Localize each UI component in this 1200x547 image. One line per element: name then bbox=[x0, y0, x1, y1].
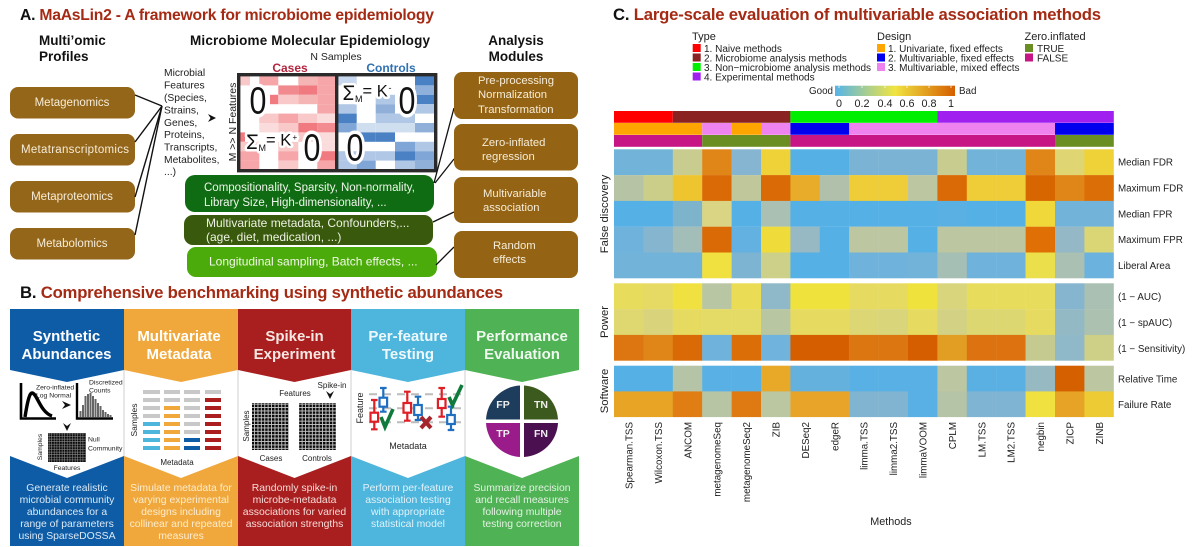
legend: design bbox=[877, 31, 1020, 74]
row labels: Maximum FDR bbox=[1118, 184, 1183, 194]
label: feature: Feature bbox=[355, 392, 365, 424]
label: discretized counts: Discretized bbox=[89, 380, 123, 386]
sum label K-: = K bbox=[362, 82, 388, 100]
module: random effects bbox=[454, 231, 578, 278]
heading: Spike-in bbox=[265, 328, 324, 345]
legend: type: 2. Microbiome analysis methods bbox=[704, 53, 847, 64]
check mark bbox=[449, 385, 462, 405]
description: range of parameters bbox=[20, 519, 114, 530]
description: varying experimental bbox=[133, 495, 229, 506]
zero label: 0 bbox=[347, 127, 363, 169]
column labels: limmaVOOM bbox=[918, 422, 930, 478]
column labels: metagenomeSeq bbox=[713, 422, 724, 497]
column labels: LM2.TSS bbox=[1007, 422, 1018, 463]
challenge box: multivariate metadata bbox=[184, 215, 433, 245]
column: synthetic abundances bbox=[10, 309, 124, 546]
sum label K+: M bbox=[258, 143, 266, 153]
module: zero-inflated regression bbox=[454, 124, 578, 170]
challenge box: multivariate metadata: (age, diet, medication, ...) bbox=[206, 230, 341, 244]
zero label: 0 bbox=[250, 80, 266, 122]
confusion pie bbox=[486, 386, 558, 457]
legend: type: Type bbox=[692, 31, 716, 43]
description: association testing bbox=[365, 495, 451, 506]
module: random effects: Random bbox=[493, 240, 536, 252]
colour scale legend: Bad bbox=[959, 86, 976, 97]
module: preprocessing bbox=[454, 72, 578, 119]
heatmap: power bbox=[614, 283, 1114, 361]
description: microbe-metadata bbox=[253, 495, 337, 506]
label: discretized counts: Counts bbox=[89, 388, 111, 394]
heading: Synthetic bbox=[33, 328, 100, 345]
label: spike-in: Spike-in bbox=[318, 381, 346, 390]
column labels: ANCOM bbox=[683, 422, 694, 458]
confusion pie: FN bbox=[534, 428, 548, 440]
matrix: cases bbox=[240, 76, 336, 170]
row labels: Median FPR bbox=[1118, 210, 1172, 220]
axis title: methods: Methods bbox=[870, 516, 912, 528]
cases matrix bbox=[252, 403, 289, 450]
confusion pie: TP bbox=[496, 428, 510, 440]
column labels: Wilcoxon.TSS bbox=[654, 422, 665, 484]
row labels: Liberal Area bbox=[1118, 261, 1171, 272]
challenge box: longitudinal: Longitudinal sampling, Batch effects, ... bbox=[209, 254, 418, 268]
module: preprocessing: Pre-processing bbox=[478, 75, 554, 87]
label: cases: Cases bbox=[272, 61, 308, 75]
heading: microbiome molecular epidemiology: Microbiome Molecular Epidemiology bbox=[190, 33, 430, 48]
legend: zero-inflated: TRUE bbox=[1037, 44, 1065, 55]
row labels: Maximum FPR bbox=[1118, 235, 1183, 246]
microbial features list: Metabolites, bbox=[164, 155, 220, 166]
challenge box: multivariate metadata: Multivariate metadata, Confounders,... bbox=[206, 216, 409, 230]
title C: C. Large-scale evaluation of multivariable association methods bbox=[613, 5, 1101, 24]
label: features axis: M >> N Features bbox=[227, 83, 239, 161]
label: controls: Controls bbox=[302, 454, 332, 463]
column separators bbox=[124, 370, 465, 456]
sum label K+: = K bbox=[266, 132, 291, 150]
heading: Evaluation bbox=[484, 346, 560, 363]
connector lines to modules bbox=[433, 108, 454, 265]
microbial features list: Features bbox=[164, 80, 205, 92]
heading: Abundances bbox=[21, 346, 112, 363]
description: association strengths bbox=[246, 519, 343, 530]
label: zero-inflated log normal: Log Normal bbox=[36, 392, 72, 400]
label: zero-inflated log normal: Zero-inflated bbox=[36, 384, 74, 392]
row labels: Relative Time bbox=[1118, 374, 1178, 386]
sum label K-: Σ bbox=[342, 82, 356, 105]
challenge box: compositionality: Library Size, High-dimensionality, ... bbox=[204, 197, 387, 209]
sum label K+: + bbox=[292, 133, 298, 142]
column labels: limma2.TSS bbox=[889, 422, 900, 475]
legend: design: 1. Univariate, fixed effects bbox=[888, 44, 1003, 55]
microbial features list: Microbial bbox=[164, 68, 205, 79]
heading: Experiment bbox=[254, 346, 335, 363]
module: multivariable association: association bbox=[483, 202, 540, 214]
legend: zero-inflated: Zero.inflated bbox=[1024, 31, 1086, 43]
legend: design: Design bbox=[877, 31, 911, 43]
arrow right bbox=[62, 401, 71, 409]
omics profile boxes: Metatranscriptomics bbox=[21, 144, 129, 156]
challenge box: compositionality bbox=[185, 175, 434, 212]
legend: zero-inflated bbox=[1024, 31, 1086, 64]
grey reference dashes bbox=[369, 394, 464, 422]
column labels: ZINB bbox=[1095, 422, 1106, 444]
colour scale legend: 1 bbox=[948, 98, 954, 110]
arrow down bbox=[63, 423, 71, 431]
column: multivariate metadata bbox=[124, 309, 238, 546]
omics profile boxes: Metaproteomics bbox=[31, 191, 113, 203]
colour scale legend: 0.4 bbox=[877, 98, 893, 110]
label: cases: Cases bbox=[260, 454, 282, 463]
column labels bbox=[624, 422, 1106, 502]
title A: A. MaAsLin2 - A framework for microbiome epidemiology bbox=[20, 7, 434, 24]
column labels: ZICP bbox=[1066, 422, 1076, 444]
challenge box: longitudinal bbox=[187, 247, 437, 277]
microbial features list: (Species, bbox=[164, 93, 207, 104]
challenge box: compositionality: Compositionality, Sparsity, Non-normality, bbox=[204, 182, 415, 194]
panel A: MaAsLin2 framework bbox=[10, 7, 578, 278]
row labels: (1 − AUC) bbox=[1118, 292, 1161, 303]
heatmap: software bbox=[614, 366, 1114, 417]
module: preprocessing: Transformation bbox=[478, 104, 554, 116]
log-normal curve bbox=[21, 383, 56, 418]
microbial features list: Strains, bbox=[164, 106, 199, 116]
column labels: LM.TSS bbox=[977, 422, 988, 457]
title B: B. Comprehensive benchmarking using synthetic abundances bbox=[20, 283, 503, 302]
column: spike-in experiment bbox=[238, 309, 351, 546]
omics profile boxes bbox=[10, 87, 135, 260]
legend: type: 3. Non−microbiome analysis methods bbox=[704, 63, 871, 74]
column: per-feature testing bbox=[351, 309, 465, 546]
check mark bbox=[381, 409, 393, 427]
column labels: DESeq2 bbox=[801, 422, 812, 458]
label: controls: Controls bbox=[366, 61, 416, 75]
legend: design: 2. Multivariable, fixed effects bbox=[888, 53, 1014, 64]
description: testing correction bbox=[482, 519, 562, 530]
microbial features list: Proteins, bbox=[164, 130, 205, 141]
heading: Per-feature bbox=[368, 328, 448, 345]
connector lines from omics to features bbox=[135, 95, 162, 235]
label: N samples: N Samples bbox=[310, 51, 362, 63]
description: using SparseDOSSA bbox=[18, 531, 116, 542]
label: metadata: Metadata bbox=[160, 458, 194, 467]
cross mark bbox=[421, 417, 431, 428]
description: and recall measures bbox=[475, 495, 569, 506]
group label: false discovery: False discovery bbox=[599, 174, 611, 253]
legend: type bbox=[692, 31, 871, 84]
column: performance evaluation bbox=[465, 309, 579, 546]
label: samples: Samples bbox=[242, 410, 251, 442]
heatmap: false discovery bbox=[614, 149, 1114, 278]
description: Randomly spike-in bbox=[252, 483, 337, 494]
column labels: limma.TSS bbox=[860, 422, 871, 470]
module: multivariable association bbox=[454, 177, 578, 223]
zero label: 0 bbox=[304, 127, 320, 169]
heading: Performance bbox=[476, 328, 568, 345]
label: features: Features bbox=[54, 465, 81, 472]
panel B: benchmarking bbox=[10, 283, 579, 546]
heading: Multivariate bbox=[137, 328, 221, 345]
sum label K+: Σ bbox=[246, 131, 259, 154]
description: Generate realistic bbox=[26, 483, 108, 494]
module: multivariable association: Multivariable bbox=[483, 188, 546, 200]
arrow bbox=[208, 114, 216, 122]
label: null community: Null bbox=[88, 436, 100, 444]
column labels: metagenomeSeq2 bbox=[742, 422, 753, 502]
heading: analysis modules: Analysis bbox=[488, 33, 544, 48]
legend: type: 4. Experimental methods bbox=[704, 72, 815, 84]
description: measures bbox=[158, 531, 204, 542]
omics profile boxes: Metagenomics bbox=[35, 97, 110, 109]
metadata table icon bbox=[143, 390, 221, 450]
heading: Testing bbox=[382, 346, 434, 363]
zero label: 0 bbox=[399, 80, 415, 122]
row labels: Failure Rate bbox=[1118, 400, 1172, 411]
label: null community: Community bbox=[88, 446, 123, 452]
column labels: negbin bbox=[1036, 422, 1047, 451]
description: abundances for a bbox=[27, 507, 107, 518]
box plots bbox=[370, 388, 455, 430]
description: Perform per-feature bbox=[363, 483, 454, 494]
heading: multi'omic profiles: Profiles bbox=[39, 49, 89, 64]
row labels: (1 − Sensitivity) bbox=[1118, 344, 1185, 355]
column labels: edgeR bbox=[830, 422, 841, 451]
panel C: evaluation heatmap bbox=[599, 5, 1185, 528]
arrow down bbox=[326, 391, 334, 399]
legend: type: 1. Naive methods bbox=[704, 44, 782, 55]
matrix frame bbox=[239, 74, 436, 172]
column labels: Spearman.TSS bbox=[624, 422, 636, 489]
row labels: (1 − spAUC) bbox=[1118, 318, 1172, 329]
description: Simulate metadata for bbox=[130, 483, 232, 494]
null community matrix bbox=[48, 433, 86, 462]
description: microbial community bbox=[20, 495, 115, 506]
omics profile boxes: Metabolomics bbox=[37, 238, 108, 250]
group label: software: Software bbox=[599, 369, 611, 413]
description: associations for varied bbox=[243, 507, 346, 518]
column labels: ZIB bbox=[772, 422, 782, 437]
heading: analysis modules: Modules bbox=[489, 49, 543, 64]
annotation tracks bbox=[614, 111, 1114, 147]
description: with appropriate bbox=[370, 507, 445, 518]
microbial features list: Transcripts, bbox=[164, 142, 217, 154]
colour scale legend: Good bbox=[809, 86, 833, 97]
description: statistical model bbox=[371, 519, 445, 530]
module: zero-inflated regression: regression bbox=[482, 151, 535, 163]
matrix: controls bbox=[338, 76, 435, 170]
module: preprocessing: Normalization bbox=[478, 89, 547, 101]
description: designs including bbox=[141, 507, 221, 518]
label: samples: Samples bbox=[129, 403, 139, 437]
legend: zero-inflated: FALSE bbox=[1037, 53, 1068, 64]
description: following multiple bbox=[482, 507, 562, 518]
microbial features list: Genes, bbox=[164, 118, 197, 129]
sum label K-: - bbox=[388, 83, 392, 93]
colour scale legend: 0 bbox=[836, 98, 842, 110]
microbial features list: ...) bbox=[164, 167, 176, 178]
module: random effects: effects bbox=[493, 254, 526, 266]
colour scale legend bbox=[809, 86, 976, 110]
confusion pie: TN bbox=[534, 399, 548, 411]
controls matrix bbox=[299, 403, 336, 450]
description: collinear and repeated bbox=[130, 519, 233, 530]
label: metadata: Metadata bbox=[389, 441, 427, 451]
colour scale legend: 0.2 bbox=[854, 98, 870, 110]
heading: multi'omic profiles: Multi’omic bbox=[39, 33, 106, 48]
label: features: Features bbox=[279, 389, 311, 398]
label: samples: Samples bbox=[37, 433, 44, 460]
group label: power: Power bbox=[599, 306, 611, 338]
legend: design: 3. Multivariable, mixed effects bbox=[888, 63, 1020, 74]
description: Summarize precision bbox=[473, 483, 571, 494]
colour scale legend: 0.6 bbox=[899, 98, 915, 110]
sum label K-: M bbox=[355, 94, 362, 104]
row labels: Median FDR bbox=[1118, 158, 1173, 168]
colour scale legend: 0.8 bbox=[921, 98, 937, 110]
heading: Metadata bbox=[146, 346, 212, 363]
histogram bbox=[77, 383, 113, 418]
confusion pie: FP bbox=[496, 399, 510, 411]
column labels: CPLM bbox=[948, 422, 959, 449]
module: zero-inflated regression: Zero-inflated bbox=[482, 137, 545, 149]
